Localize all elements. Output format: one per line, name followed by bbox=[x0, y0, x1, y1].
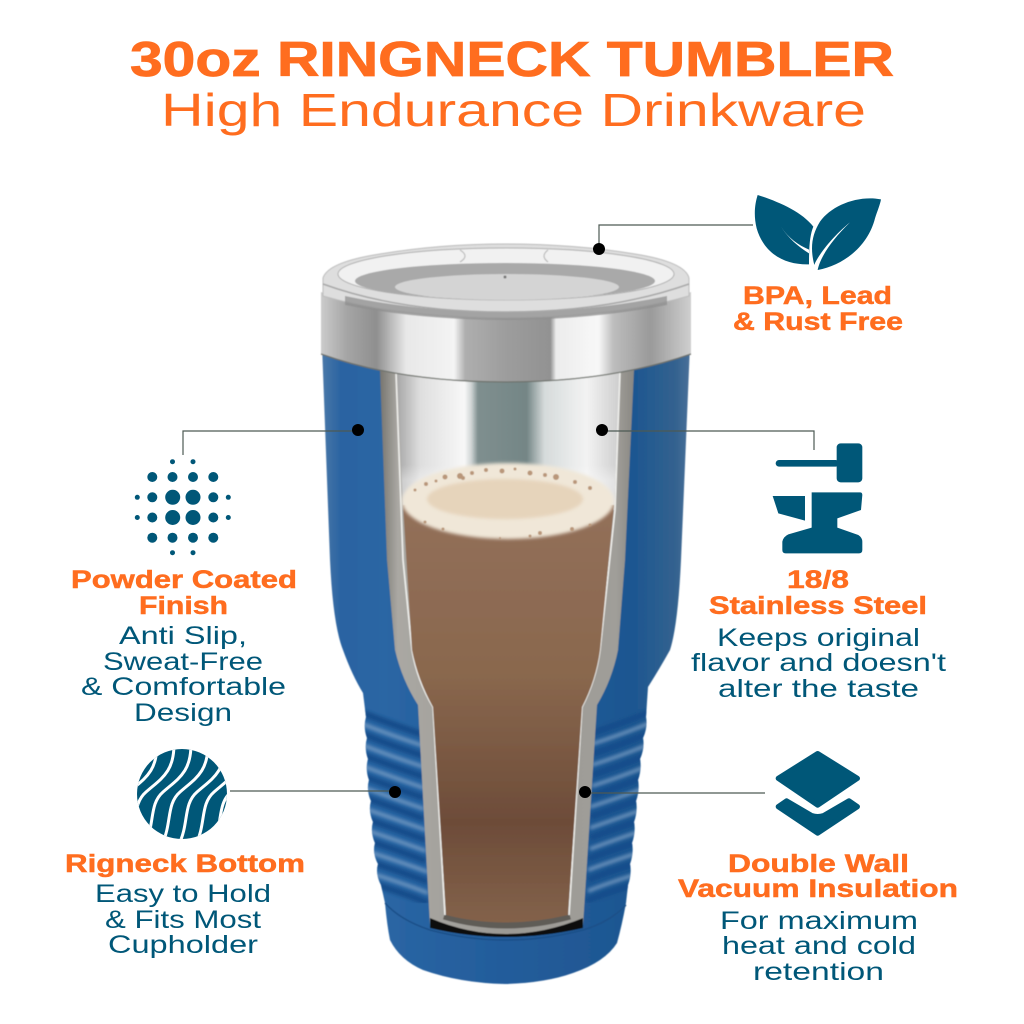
heading: Stainless Steel bbox=[709, 592, 927, 620]
body text: retention bbox=[753, 958, 884, 986]
body text: Design bbox=[134, 699, 232, 727]
body text: Sweat-Free bbox=[103, 648, 263, 676]
steel band bbox=[321, 292, 691, 382]
heading: Finish bbox=[139, 592, 228, 620]
icon: leaves bbox=[755, 195, 881, 270]
body ribs bbox=[360, 712, 650, 903]
body text: For maximum bbox=[720, 907, 918, 935]
body text: flavor and doesn't bbox=[691, 649, 946, 677]
inner stainless surface bbox=[397, 370, 620, 510]
body text: & Comfortable bbox=[81, 673, 286, 701]
bottom shadow bbox=[430, 918, 583, 937]
icon: layers bbox=[778, 754, 857, 833]
body text: Anti Slip, bbox=[119, 622, 247, 650]
label: BPA, Lead bbox=[743, 282, 892, 310]
panel: BPA free bbox=[733, 195, 903, 336]
base seam bbox=[385, 903, 626, 940]
steel wall bbox=[380, 370, 634, 936]
panel: stainless steel bbox=[691, 443, 946, 703]
subheading: High Endurance Drinkware bbox=[161, 84, 866, 136]
leader: BPA bbox=[593, 225, 753, 255]
leader: rigneck bbox=[230, 786, 401, 798]
tumbler cutaway illustration bbox=[321, 244, 691, 984]
heading: Double Wall bbox=[728, 850, 909, 878]
icon: waves circle bbox=[137, 749, 227, 839]
milk coffee bbox=[403, 505, 614, 922]
lid bbox=[323, 244, 689, 320]
leader: double wall bbox=[579, 786, 765, 798]
title bbox=[130, 33, 894, 136]
panel: double wall insulation bbox=[678, 754, 958, 986]
heading: Rigneck Bottom bbox=[65, 850, 305, 878]
wall highlights bbox=[396, 372, 620, 915]
leader: powder coat bbox=[183, 424, 364, 455]
panel: powder coated finish bbox=[71, 459, 297, 727]
body text: heat and cold bbox=[722, 932, 916, 960]
body text: & Fits Most bbox=[105, 906, 261, 934]
tumbler body bbox=[322, 345, 690, 984]
body text: Easy to Hold bbox=[95, 880, 271, 908]
body text: Keeps original bbox=[717, 624, 920, 652]
icon: hammer and anvil bbox=[773, 443, 862, 553]
heading: 18/8 bbox=[787, 566, 849, 594]
body text: alter the taste bbox=[718, 675, 919, 703]
body text: Cupholder bbox=[108, 931, 258, 959]
icon: halftone dots bbox=[135, 459, 231, 555]
panel: rigneck bottom bbox=[65, 744, 305, 959]
foam bbox=[402, 463, 614, 539]
leader: stainless bbox=[596, 424, 814, 450]
heading: Vacuum Insulation bbox=[678, 875, 958, 903]
heading: product name: 30oz RINGNECK TUMBLER bbox=[130, 33, 894, 87]
heading: Powder Coated bbox=[71, 566, 297, 594]
label: & Rust Free bbox=[733, 308, 903, 336]
